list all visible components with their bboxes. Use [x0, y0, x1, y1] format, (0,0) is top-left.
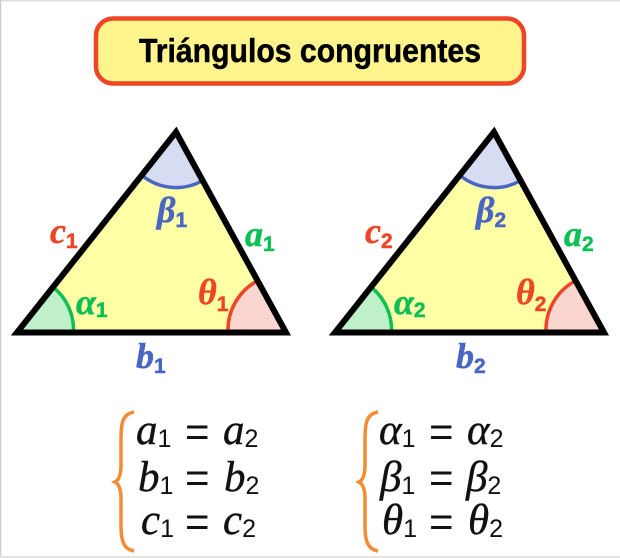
angle theta 1 — [228, 281, 286, 332]
label alpha1: α — [76, 282, 96, 322]
title: Triángulos congruentes — [139, 32, 481, 69]
equations sides: c — [141, 497, 160, 544]
label theta1: 1 — [217, 293, 229, 316]
equations angles: β — [466, 454, 487, 501]
label c2: c — [365, 211, 381, 251]
equations sides — [136, 407, 259, 545]
equations sides: 2 — [244, 425, 258, 453]
equations angles: = — [429, 408, 454, 455]
equations angles: 2 — [489, 515, 503, 543]
equations angles: α — [467, 407, 490, 454]
triangle 2 — [335, 132, 604, 332]
label beta2: 2 — [494, 209, 506, 232]
label c2: 2 — [381, 230, 393, 253]
title — [96, 18, 524, 84]
angle theta 2 — [546, 281, 604, 332]
label theta2: θ — [516, 272, 535, 312]
equations sides: = — [185, 498, 210, 545]
label c1: 1 — [66, 230, 78, 253]
label alpha2: 2 — [414, 299, 426, 322]
equations angles: θ — [468, 497, 489, 544]
triangle 1 — [17, 132, 286, 332]
label b1: b — [136, 336, 154, 376]
equations sides: = — [185, 454, 210, 501]
label beta1: β — [157, 190, 175, 230]
label b2: 2 — [474, 355, 486, 378]
equations sides: = — [185, 408, 210, 455]
equations sides: 2 — [246, 472, 259, 500]
equations angles: 1 — [402, 425, 415, 453]
equations sides: c — [223, 497, 242, 544]
equations sides: b — [224, 454, 246, 501]
equations sides: 1 — [160, 472, 173, 500]
equations angles: β — [380, 454, 401, 501]
label a2: 2 — [582, 233, 594, 256]
equations sides: 1 — [158, 425, 171, 453]
label alpha2: α — [394, 282, 414, 322]
angle alpha 2 — [335, 287, 392, 332]
equations angles — [379, 407, 503, 545]
label b2: b — [456, 336, 474, 376]
label theta1: θ — [198, 272, 217, 312]
angle beta 1 — [144, 132, 201, 188]
label a2: a — [564, 214, 582, 254]
equations sides: a — [136, 407, 158, 454]
equations angles: = — [429, 498, 454, 545]
equations angles: = — [429, 454, 454, 501]
equations sides: b — [138, 454, 160, 501]
triangle 2 outline — [335, 132, 604, 332]
label c1: c — [50, 211, 66, 251]
label a1: 1 — [263, 233, 275, 256]
label beta1: 1 — [175, 209, 187, 232]
left brace — [115, 412, 134, 551]
angle alpha 1 — [17, 287, 74, 332]
label b1: 1 — [154, 355, 166, 378]
triangle 1 outline — [17, 132, 286, 332]
equations sides: a — [223, 407, 244, 454]
right brace — [359, 412, 378, 551]
equations sides: 1 — [160, 515, 174, 543]
equations angles: 2 — [487, 472, 501, 500]
equations sides: 2 — [242, 515, 256, 543]
equations angles: 1 — [401, 472, 415, 500]
label alpha1: 1 — [96, 299, 108, 322]
equations angles: 2 — [490, 425, 503, 453]
label beta2: β — [476, 190, 494, 230]
equations angles: α — [379, 407, 402, 454]
equations angles: θ — [382, 497, 403, 544]
label a1: a — [245, 214, 263, 254]
angle beta 2 — [462, 132, 519, 188]
label theta2: 2 — [535, 293, 546, 316]
equations angles: 1 — [403, 515, 417, 543]
